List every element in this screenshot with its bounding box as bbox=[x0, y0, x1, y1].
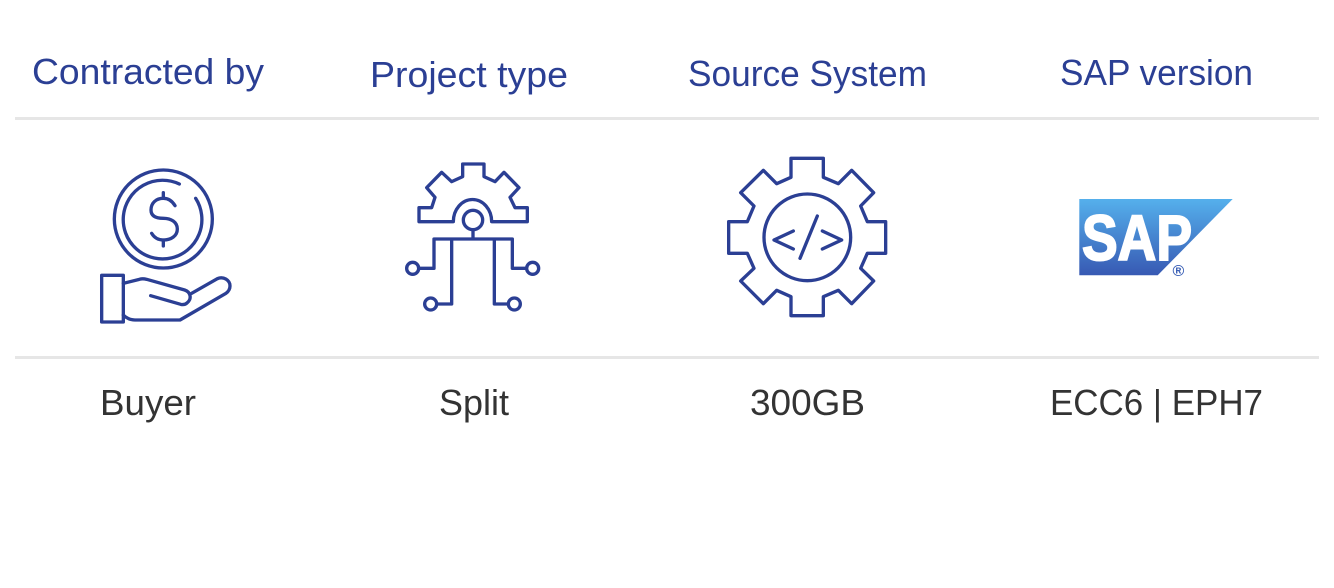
icon: hand holding dollar coin bbox=[102, 170, 230, 322]
icon: SAP logo: SAP bbox=[1082, 202, 1192, 274]
heading: SAP version: SAP version bbox=[1060, 52, 1253, 93]
value: 300GB: 300GB bbox=[750, 382, 865, 423]
icon: half gear with circuit bbox=[407, 164, 539, 310]
value: Buyer: Buyer bbox=[100, 382, 196, 423]
value: ECC6 | EPH7: ECC6 | EPH7 bbox=[1050, 382, 1263, 423]
heading: Project type: Project type bbox=[370, 54, 568, 95]
icon: gear with code symbol bbox=[729, 158, 886, 316]
icon: SAP logo: ® bbox=[1172, 263, 1184, 280]
heading: Contracted by: Contracted by bbox=[32, 51, 264, 92]
value: Split: Split bbox=[439, 382, 509, 423]
heading: Source System: Source System bbox=[688, 53, 927, 94]
